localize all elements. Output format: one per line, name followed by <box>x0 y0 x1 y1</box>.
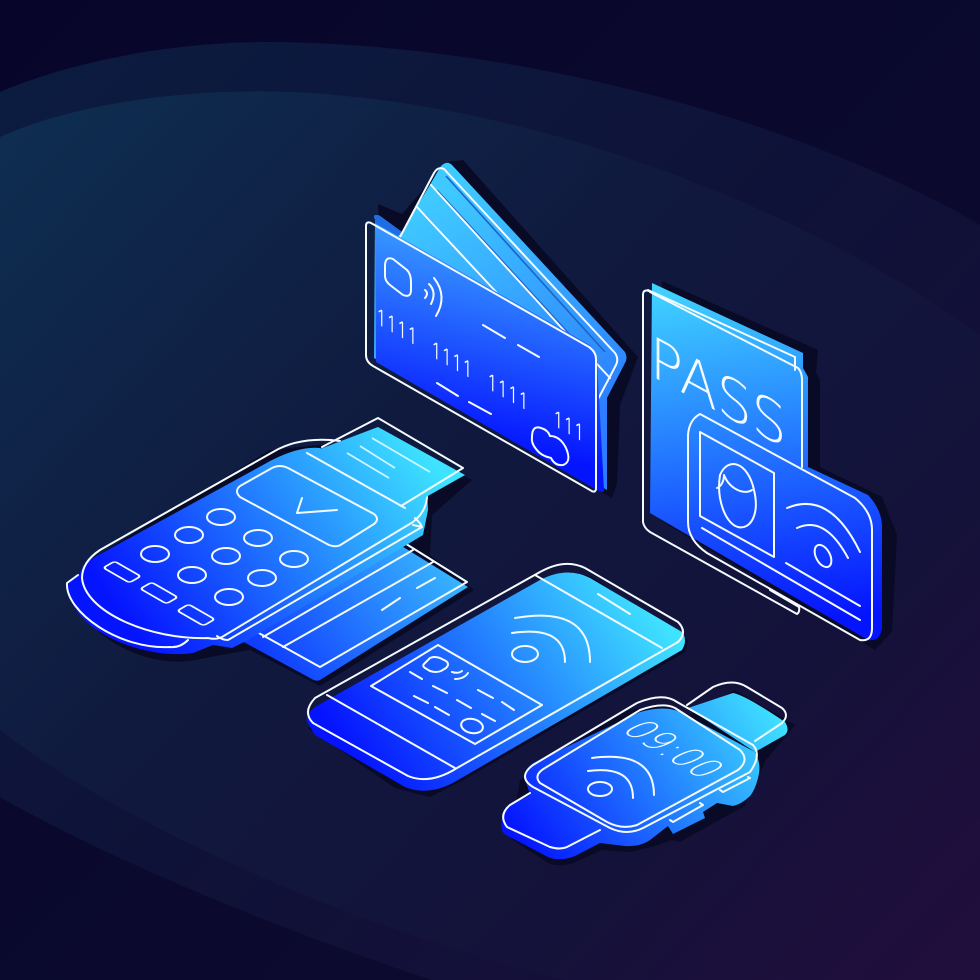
side buttons <box>670 777 750 822</box>
card dashes <box>437 325 539 414</box>
card numbers: 1111 <box>376 305 418 351</box>
card numbers <box>376 305 584 447</box>
back card left edge <box>374 215 402 250</box>
ID card <box>688 414 872 640</box>
card logo <box>532 427 568 465</box>
front card outline <box>366 222 596 492</box>
watch screen <box>537 705 745 827</box>
credit cards wallet <box>366 160 638 498</box>
receipt paper <box>307 418 465 510</box>
back card lines <box>400 168 617 403</box>
terminal screen <box>237 466 377 546</box>
watch straps <box>503 682 786 848</box>
back fanned cards <box>374 163 626 490</box>
passport and ID card <box>643 281 897 650</box>
check mark <box>297 498 337 513</box>
phone lines <box>327 575 662 768</box>
card chip <box>385 258 411 296</box>
terminal outlines <box>67 440 427 647</box>
phone wireless icon <box>512 616 590 662</box>
keypad <box>103 509 308 626</box>
passport body <box>650 283 882 640</box>
top strap fill <box>688 693 788 752</box>
phone body <box>307 572 685 791</box>
payment terminal <box>67 418 474 686</box>
ID wireless icon <box>787 504 860 570</box>
ID lines <box>702 528 860 620</box>
passport word: PASS <box>650 323 786 463</box>
watch case and lower strap fill <box>502 708 759 859</box>
watch wireless icon <box>588 757 654 798</box>
watch time: 09:00 <box>611 715 736 783</box>
smartphone <box>307 564 688 797</box>
front card <box>375 223 604 492</box>
contactless waves <box>425 278 442 316</box>
mini card <box>371 645 542 744</box>
card numbers: 111 <box>553 407 584 447</box>
face <box>717 464 756 527</box>
case outline <box>525 697 757 832</box>
smart watch <box>502 682 795 865</box>
ID photo <box>700 432 774 557</box>
phone outline <box>308 564 683 779</box>
card numbers: 1111 <box>487 370 529 416</box>
terminal body <box>68 448 428 654</box>
card numbers: 1111 <box>431 338 473 384</box>
card slip <box>240 542 468 681</box>
passport outline <box>643 290 802 614</box>
